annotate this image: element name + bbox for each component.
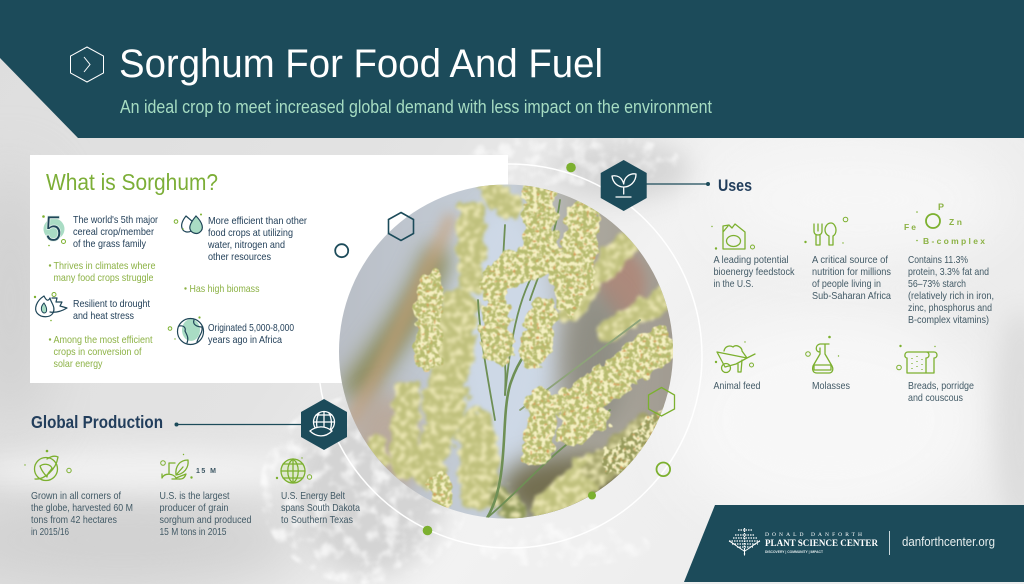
- text: more efficient: [207, 215, 307, 263]
- text: bioenergy: [714, 254, 795, 290]
- logo: fan mark: [729, 528, 760, 556]
- text: bioenergy: bioenergy feedstock: [714, 266, 795, 278]
- badge: uses hexagon with plant icon: [601, 160, 647, 211]
- logo: wordmark: DISCOVERY | COMMUNITY | IMPACT: [765, 550, 824, 554]
- icon: globe grid: [276, 457, 312, 483]
- heading: Uses: [718, 176, 752, 195]
- decorative ring: dark: [335, 244, 348, 257]
- blurred seed heads: [373, 192, 668, 512]
- icon: hexagon chevron: [70, 47, 104, 82]
- header banner: [0, 0, 1024, 138]
- sharp seed heads: [428, 195, 672, 500]
- green dot: top: [566, 163, 576, 172]
- decorative hexagon: green outline: [648, 388, 674, 416]
- text: breads: Breads, porridge: [908, 380, 974, 392]
- text: largest producer: [160, 490, 252, 538]
- text: grown in all corners: the globe, harvested 60 M: [31, 502, 133, 514]
- text: composition: zinc, phosphorus and: [908, 302, 992, 314]
- text: nutrition: [812, 254, 891, 302]
- text: bioenergy: A leading potential: [714, 254, 788, 266]
- text: nutrition: nutrition for millions: [812, 266, 891, 278]
- text: energy belt: [281, 490, 360, 526]
- icon: globe africa: [168, 316, 204, 344]
- text: drought resilient: and heat stress: [73, 310, 134, 322]
- icon: globe with orbit: [24, 450, 71, 480]
- label: 15 M: 15 M: [196, 468, 216, 475]
- text: molasses: Molasses: [812, 380, 850, 392]
- stems: [478, 200, 640, 518]
- connector: uses: [640, 182, 710, 186]
- icon: wheelbarrow: [715, 341, 755, 372]
- heading: What is Sorghum?: [46, 169, 218, 195]
- text: largest producer: 15 M tons in 2015: [160, 526, 227, 538]
- text: grown in all corners: tons from 42 hectares: [31, 514, 117, 526]
- panel: what is sorghum: [30, 155, 508, 383]
- bullet: solar energy conversion: [49, 334, 153, 370]
- section: global production: [24, 412, 360, 538]
- heading: Global Production: [31, 412, 163, 432]
- text: grown in all corners: in 2015/16: [31, 526, 69, 538]
- text: largest producer: sorghum and produced: [160, 514, 252, 526]
- text: breads: and couscous: [908, 392, 963, 404]
- icon: hand holding leaf: [161, 454, 216, 479]
- text: breads: [908, 380, 974, 404]
- text: origin: years ago in Africa: [208, 334, 282, 346]
- text: energy belt: U.S. Energy Belt: [281, 490, 345, 502]
- icon: minerals: [904, 202, 985, 246]
- text: nutrition: of people living in: [812, 278, 881, 290]
- bullet: thrives in climates: Thrives in climates where: [54, 260, 156, 272]
- icon: water drops: [174, 214, 202, 233]
- icon: fork and spoon: [804, 217, 848, 245]
- icon: molasses bottle: [806, 336, 839, 373]
- text: origin: [208, 322, 294, 346]
- bullet: solar energy conversion: crops in conversion of: [54, 346, 142, 358]
- logo: wordmark: PLANT SCIENCE CENTER: [765, 538, 879, 548]
- text: drought resilient: [73, 298, 150, 322]
- bullet: high biomass: Has high biomass: [190, 283, 260, 295]
- badge: global production hexagon with globe icon: [301, 399, 347, 450]
- icon: number five: 5: [45, 208, 62, 249]
- decorative ring: green: [656, 462, 670, 476]
- connector: global production: [174, 422, 305, 426]
- logo: wordmark: DONALD DANFORTH: [765, 532, 862, 538]
- icon: flame and wind: [34, 292, 67, 321]
- text: more efficient: More efficient than other: [208, 215, 307, 227]
- text: energy belt: to Southern Texas: [281, 514, 353, 526]
- text: composition: [908, 254, 994, 326]
- text: bioenergy: in the U.S.: [714, 278, 754, 290]
- text: animal feed: Animal feed: [714, 380, 761, 392]
- bullet: thrives in climates: many food crops struggle: [54, 272, 154, 284]
- text: largest producer: producer of grain: [160, 502, 229, 514]
- title: Sorghum For Food And Fuel: [119, 42, 603, 86]
- text: grown in all corners: [31, 490, 133, 538]
- green dot: photo: [588, 492, 596, 500]
- text: composition: B-complex vitamins): [908, 314, 989, 326]
- icon: minerals: Zn: [949, 217, 962, 227]
- text: more efficient: other resources: [208, 251, 271, 263]
- text: 5th major crop: The world's 5th major: [73, 214, 158, 226]
- text: 5th major crop: [73, 214, 158, 250]
- text: largest producer: U.S. is the largest: [160, 490, 230, 502]
- outer white ring: [318, 164, 702, 548]
- text: energy belt: spans South Dakota: [281, 502, 360, 514]
- text: 5th major crop: of the grass family: [73, 238, 147, 250]
- divider: [888, 531, 890, 555]
- text: nutrition: Sub-Saharan Africa: [812, 290, 891, 302]
- footer banner: [684, 505, 1024, 582]
- icon: loaf of bread: [897, 345, 937, 373]
- text: nutrition: A critical source of: [812, 254, 888, 266]
- text: composition: 56–73% starch: [908, 278, 966, 290]
- text: composition: Contains 11.3%: [908, 254, 968, 266]
- bullet: thrives in climates: [49, 260, 156, 284]
- logo: wordmark: [765, 532, 879, 554]
- bullet: solar energy conversion: Among the most efficient: [54, 334, 153, 346]
- green dot: bottom: [423, 526, 432, 535]
- text: more efficient: water, nitrogen and: [207, 239, 285, 251]
- text: 5th major crop: cereal crop/member: [73, 226, 154, 238]
- decorative hexagon: dark outline: [388, 212, 414, 240]
- bullet: solar energy conversion: solar energy: [54, 358, 103, 370]
- text: more efficient: food crops at utilizing: [208, 227, 293, 239]
- photo: sorghum plant in circle: [335, 180, 680, 525]
- subtitle: An ideal crop to meet increased global demand with less impact on the environment: [120, 97, 712, 117]
- icon: fuel can: [711, 224, 754, 250]
- section: uses: [711, 176, 994, 404]
- icon: minerals: P: [938, 202, 944, 212]
- text: composition: protein, 3.3% fat and: [908, 266, 989, 278]
- text: origin: Originated 5,000-8,000: [208, 322, 294, 334]
- text: drought resilient: Resilient to drought: [73, 298, 150, 310]
- text: composition: (relatively rich in iron,: [908, 290, 994, 302]
- icon: minerals: B-complex: [923, 236, 985, 246]
- icon: minerals: Fe: [904, 222, 916, 232]
- website: danforthcenter.org: [902, 534, 995, 549]
- text: grown in all corners: Grown in all corners of: [31, 490, 121, 502]
